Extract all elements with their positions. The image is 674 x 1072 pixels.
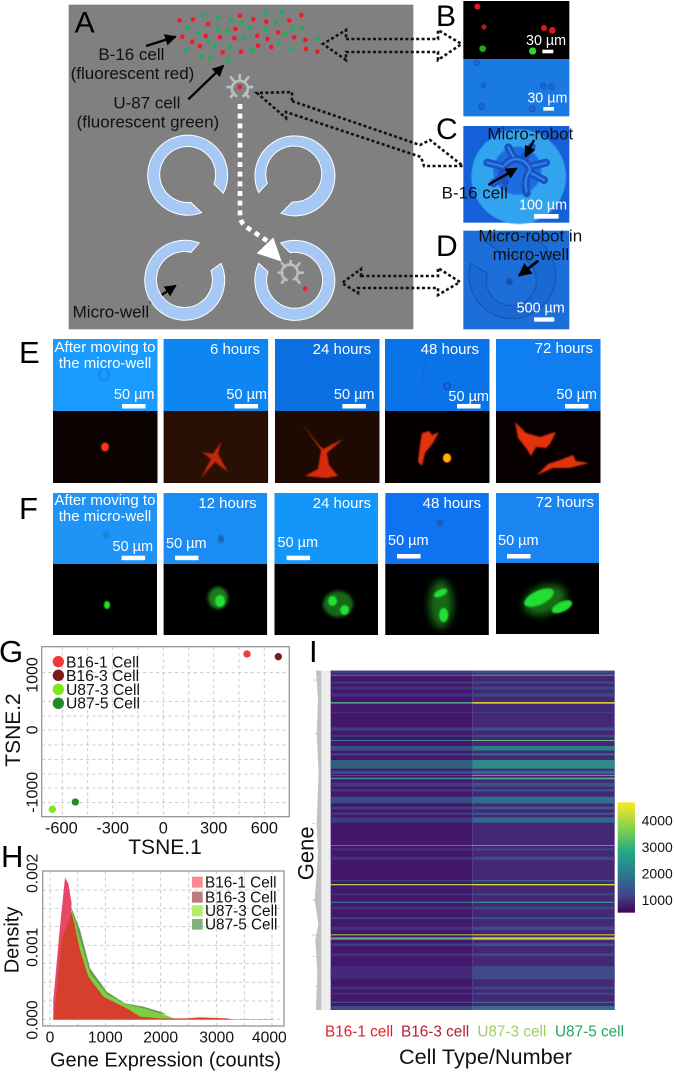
- color scale labels: 3000: [642, 839, 673, 855]
- label: B-16 cell: B-16 cell: [98, 45, 164, 64]
- scale bar: [534, 317, 554, 322]
- chart G: TSNE scatter: [2, 647, 289, 837]
- column label B16-1: B16-1 cell: [325, 1024, 393, 1041]
- E image 4: 50 µm: [448, 389, 489, 405]
- panel label F: F: [19, 491, 38, 526]
- right half base: [472, 671, 615, 1010]
- E image 5: [496, 339, 600, 483]
- E image 2: [164, 339, 268, 483]
- arrow: [519, 261, 538, 276]
- arrow to U-87 cell: [188, 66, 223, 99]
- gene dendrogram strip: [312, 671, 331, 1010]
- x tick labels: -600: [45, 819, 78, 837]
- y tick labels: 0: [24, 725, 41, 734]
- F image 2: 12 hours: [198, 495, 257, 512]
- panel C: micro-robot image: [442, 124, 573, 224]
- scale bar: [534, 214, 559, 219]
- E image 5: 72 hours: [535, 340, 593, 357]
- arrow to micro-well: [150, 286, 176, 303]
- dotted double arrow A to D: [342, 268, 460, 295]
- micro-robot with cell: [228, 75, 252, 97]
- label: fluorescent green: (fluorescent green): [77, 112, 219, 131]
- scale label 30 um bottom: 30 µm: [527, 90, 567, 106]
- micro-well top right: [255, 136, 335, 216]
- E image 2: 50 µm: [226, 387, 267, 403]
- E image 3: [275, 339, 380, 483]
- legend: U87-5 Cell: [66, 696, 140, 713]
- robot body: [493, 147, 541, 195]
- x tick labels: 0: [46, 1030, 55, 1047]
- color scale labels: 2000: [642, 865, 673, 881]
- bright field cells: [474, 60, 555, 112]
- x axis title TSNE.1: TSNE.1: [128, 836, 202, 859]
- robot shape: [487, 147, 546, 193]
- x tick labels: 4000: [252, 1030, 287, 1047]
- column label U87-5: U87-5 cell: [555, 1024, 624, 1041]
- arrow to cell: [488, 168, 517, 185]
- y axis title: TSNE.2: [2, 693, 25, 767]
- x tick labels: 1000: [88, 1030, 123, 1047]
- cell inside robot: [237, 85, 242, 89]
- F image 4: [385, 493, 489, 635]
- F image 1: the micro-well: [59, 508, 151, 525]
- y tick labels: 0.002: [24, 854, 41, 893]
- x tick labels: [46, 1030, 287, 1047]
- y tick labels: 0.000: [24, 1000, 41, 1040]
- E image 1: 50 µm: [114, 387, 154, 403]
- E image 5: 50 µm: [556, 387, 597, 403]
- panel label A: A: [75, 7, 95, 40]
- E image 4: [385, 339, 490, 483]
- F image 3: 24 hours: [313, 495, 371, 512]
- panel A: schematic: [69, 5, 413, 329]
- chart I: heatmap: [293, 671, 673, 1069]
- legend: B16-1 Cell: [205, 874, 277, 891]
- x tick labels: 2000: [143, 1030, 178, 1047]
- E image 3: 24 hours: [313, 341, 371, 358]
- legend: U87-3 Cell: [66, 682, 140, 699]
- legend: U87-5 Cell: [205, 916, 277, 933]
- E image 1: After moving to: [55, 339, 155, 356]
- arrow to B-16 cell: [146, 37, 176, 46]
- released cell: [303, 286, 308, 291]
- micro-well bottom right: [255, 240, 335, 320]
- F image 5: 72 hours: [536, 494, 594, 511]
- scale label 500 um: 500 µm: [517, 301, 565, 317]
- E image 1: the micro-well: [59, 355, 151, 372]
- y axis title: Gene: [293, 826, 318, 880]
- panel B: fluorescence and bright field images: [463, 1, 569, 116]
- E image 2: 6 hours: [210, 341, 260, 358]
- y tick labels: [24, 854, 41, 1040]
- x tick labels: [45, 819, 278, 837]
- dotted double arrow A to C: [257, 92, 463, 166]
- x axis title: Gene Expression (counts): [50, 1050, 281, 1072]
- scatter points: [49, 650, 282, 813]
- F image 4: 48 hours: [423, 495, 481, 512]
- y tick labels: [24, 657, 41, 813]
- label micro-well: micro-well: [493, 245, 569, 264]
- right half stripes: [472, 671, 615, 1010]
- arrow to robot: [525, 140, 534, 157]
- left half stripes: [331, 671, 472, 1010]
- E image 3: 50 µm: [334, 387, 374, 403]
- left half base: [331, 671, 472, 1010]
- legend: B16-3 Cell: [66, 668, 139, 685]
- fluorescent cells: [474, 4, 556, 55]
- x tick labels: -300: [96, 819, 129, 837]
- F image 5: [496, 493, 599, 634]
- y tick labels: -1000: [24, 772, 41, 813]
- B16 red density: [53, 912, 233, 1019]
- row F: U-87 time lapse: [53, 492, 599, 635]
- legend: [192, 874, 277, 933]
- scale label 100 um: 100 µm: [519, 197, 567, 213]
- x tick labels: 300: [200, 819, 227, 837]
- panel label D: D: [436, 230, 458, 263]
- label: U-87 cell: U-87 cell: [113, 93, 180, 112]
- legend: U87-3 Cell: [205, 903, 277, 920]
- white dashed path: [240, 104, 268, 242]
- green cells: [184, 10, 320, 63]
- legend: [53, 654, 140, 713]
- x axis title: Cell Type/Number: [399, 1044, 572, 1069]
- label: Micro-well: Micro-well: [73, 302, 149, 321]
- red cells: [177, 13, 320, 55]
- F image 2: 50 µm: [166, 536, 207, 552]
- label micro-robot in: Micro-robot in: [478, 227, 582, 246]
- scale label 30 um top: 30 µm: [526, 33, 566, 49]
- column label U87-3: U87-3 cell: [477, 1024, 546, 1041]
- panel label E: E: [19, 335, 40, 370]
- F image 3: [274, 493, 378, 635]
- panel label B: B: [436, 0, 456, 33]
- y axis title: Density: [1, 907, 23, 973]
- x tick labels: 3000: [199, 1030, 234, 1047]
- F image 1: 50 µm: [112, 539, 153, 555]
- color scale bar: [618, 802, 635, 913]
- color scale labels: 1000: [642, 892, 673, 908]
- panel label I: I: [309, 634, 318, 669]
- micro-well bottom left: [145, 240, 225, 320]
- scale bar bottom: [543, 107, 554, 111]
- color scale labels: [642, 813, 673, 908]
- label micro-robot: Micro-robot: [487, 124, 573, 143]
- column label B16-3: B16-3 cell: [401, 1024, 469, 1041]
- F image 5: 50 µm: [498, 533, 539, 549]
- white arrow head: [257, 237, 282, 262]
- E image 4: 48 hours: [421, 341, 479, 358]
- inner robot line: [487, 147, 546, 192]
- B16 pink density: [53, 878, 72, 1019]
- F image 1: After moving to: [55, 492, 155, 509]
- label: fluorescent red: (fluorescent red): [71, 64, 194, 83]
- F image 4: 50 µm: [388, 533, 429, 549]
- F image 2: [164, 493, 267, 635]
- F image 3: 50 µm: [278, 535, 318, 551]
- color scale labels: 4000: [642, 813, 673, 829]
- E image 1: [53, 339, 158, 483]
- micro-robot in well: [279, 261, 303, 283]
- x tick labels: 600: [251, 819, 278, 837]
- micro-well ring: [469, 232, 556, 319]
- y tick labels: 1000: [24, 657, 41, 693]
- F image 1: [53, 492, 157, 635]
- dotted double arrow A to B: [323, 30, 462, 60]
- U87 density: [53, 907, 273, 1020]
- y tick labels: 0.001: [24, 928, 41, 967]
- scale bar top: [542, 50, 553, 53]
- label B-16 cell: B-16 cell: [442, 183, 508, 202]
- U87-5 shade: [71, 907, 167, 1014]
- row E: B-16 time lapse: [53, 339, 600, 483]
- robot marker: [506, 278, 513, 285]
- panel label C: C: [436, 113, 458, 146]
- panel D: robot in micro-well image: [463, 227, 582, 329]
- legend: B16-1 Cell: [66, 654, 139, 671]
- chart H: density: [1, 854, 287, 1072]
- x tick labels: 0: [159, 819, 168, 837]
- micro-well top left: [148, 135, 228, 215]
- legend: B16-3 Cell: [205, 889, 277, 906]
- panel label H: H: [1, 839, 23, 874]
